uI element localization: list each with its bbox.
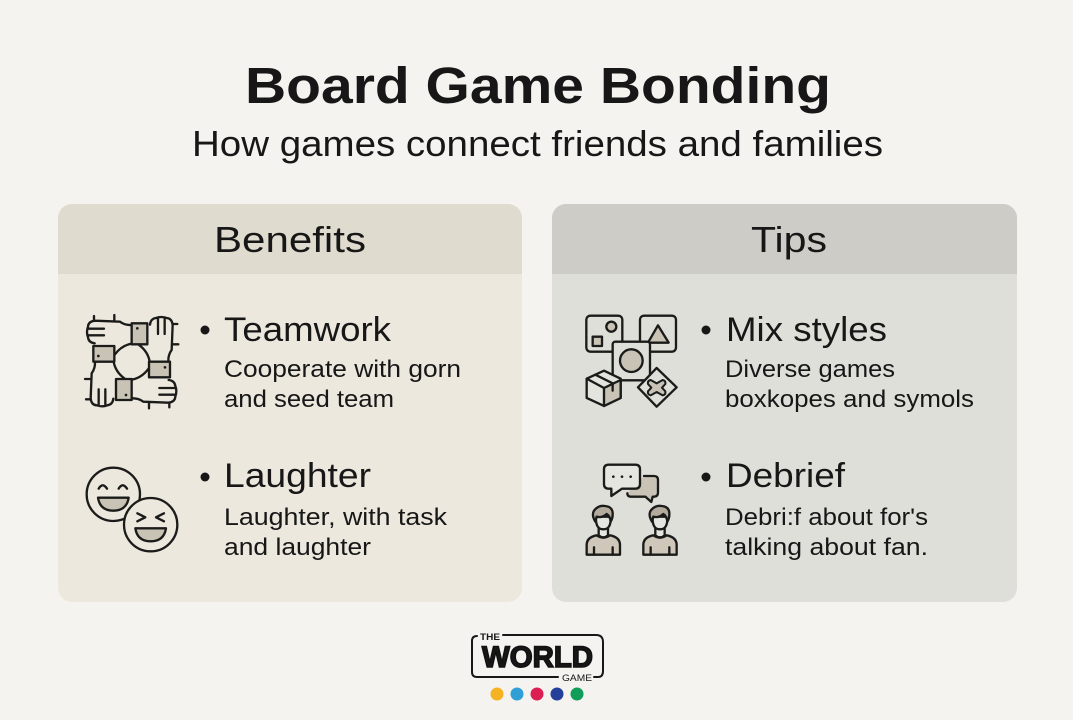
- item: mix styles: Diverse games: [725, 356, 895, 383]
- title: Board Game Bonding: [245, 57, 831, 114]
- heading: benefits: Benefits: [214, 219, 366, 260]
- logo frame: [472, 635, 603, 677]
- item: laughter: Laughter, with task: [224, 504, 448, 531]
- item: debrief: [702, 457, 928, 561]
- item: debrief: talking about fan.: [725, 534, 928, 561]
- item: laughter: [200, 457, 448, 561]
- item: laughter: and laughter: [224, 534, 371, 561]
- logo dots: [490, 688, 584, 700]
- item: laughter: Laughter: [224, 457, 371, 495]
- icon: four interlocking hands: [85, 315, 178, 408]
- logo: The World Game: GAME: [562, 673, 592, 683]
- logo: The World Game: [472, 632, 603, 700]
- icon: laughing faces: [87, 468, 177, 551]
- item: mix styles: boxkopes and symols: [725, 386, 974, 413]
- icon: game pieces and boxes: [586, 316, 677, 407]
- logo: The World Game: WORLD: [482, 641, 593, 674]
- item: teamwork: and seed team: [224, 386, 394, 413]
- heading: tips: Tips: [751, 219, 827, 260]
- item: mix styles: [702, 311, 974, 413]
- item: debrief: Debrief: [726, 457, 846, 495]
- panel background: tips: [552, 204, 1017, 602]
- panel: benefits: [58, 204, 522, 602]
- item: debrief: Debri:f about for's: [725, 504, 928, 531]
- panel: tips: [552, 204, 1017, 602]
- item: teamwork: Teamwork: [224, 311, 392, 349]
- item: mix styles: Mix styles: [726, 311, 887, 349]
- item: teamwork: Cooperate with gorn: [224, 356, 461, 383]
- logo text: THE: [480, 632, 500, 642]
- icon: two people talking: [587, 465, 677, 555]
- subtitle: How games connect friends and families: [192, 123, 883, 164]
- panel header: benefits: [58, 204, 522, 274]
- panel background: benefits: [58, 204, 522, 602]
- item: teamwork: [200, 311, 461, 413]
- panel header: tips: [552, 204, 1017, 274]
